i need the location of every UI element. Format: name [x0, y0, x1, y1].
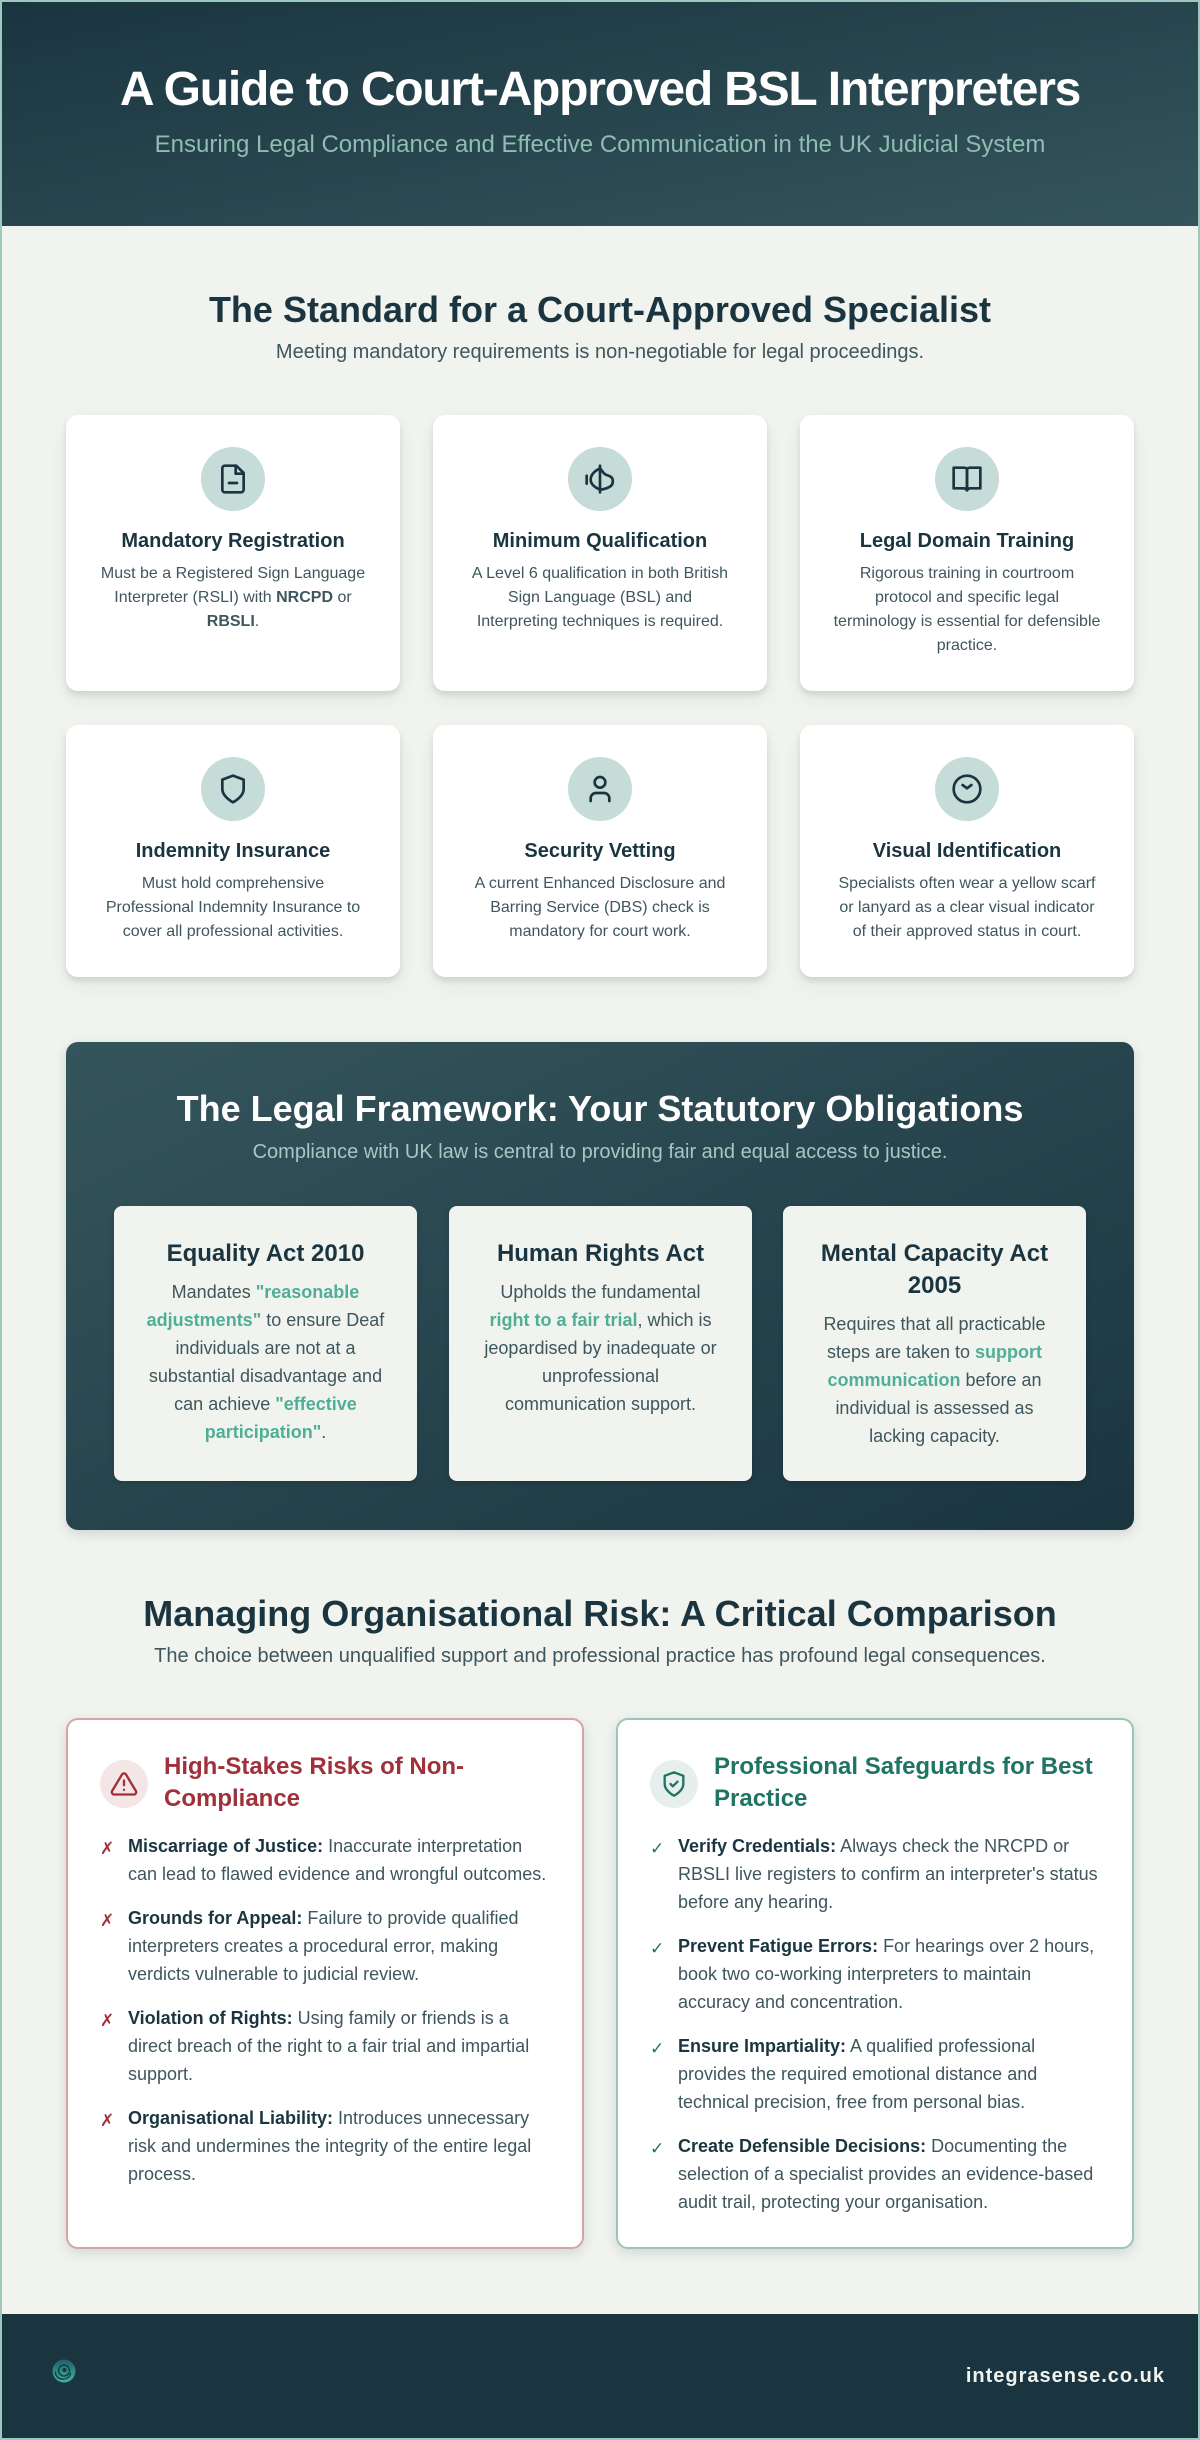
card: minimum qualification — [433, 415, 767, 691]
risk item — [100, 2108, 531, 2184]
safeguard item: audit trail, protecting your organisation. — [678, 2192, 988, 2212]
subheading: organisational risk: The choice between unqualified support and professional practice has profound legal consequences. — [154, 1645, 1046, 1667]
icon: warning triangle — [100, 1760, 148, 1808]
card: mental capacity act: Requires that all practicable — [823, 1314, 1046, 1334]
risk item: ✗ — [100, 1839, 114, 1859]
card: mandatory registration: Must be a Registered Sign Language — [101, 565, 365, 582]
subheading: legal framework: Compliance with UK law is central to providing fair and equal access to justice. — [253, 1141, 947, 1163]
risk item: Violation of Rights: Using family or friends is a — [128, 2008, 509, 2028]
card: mandatory registration: Interpreter (RSLI) with NRCPD or — [114, 589, 352, 606]
card: legal domain training: practice. — [937, 637, 997, 654]
card: indemnity insurance: Professional Indemnity Insurance to — [106, 899, 360, 916]
risk item: risk and undermines the integrity of the entire legal — [128, 2136, 531, 2156]
safeguard item: ✓ — [650, 1839, 664, 1859]
heading: the standard: The Standard for a Court-Approved Specialist — [209, 289, 991, 330]
safeguard item: book two co-working interpreters to maintain — [678, 1964, 1031, 1984]
card: human rights act: Human Rights Act — [497, 1240, 704, 1267]
card: indemnity insurance: Must hold comprehensive — [142, 875, 324, 892]
card: human rights act: Upholds the fundamental — [500, 1282, 701, 1302]
title: A Guide to Court-Approved BSL Interpreters — [120, 63, 1080, 116]
card: mandatory registration: Mandatory Registration — [121, 530, 345, 552]
panel: risks — [66, 1718, 584, 2249]
heading: risks — [164, 1753, 464, 1812]
card: visual identification: Visual Identification — [873, 840, 1061, 862]
card: equality act: Equality Act 2010 — [167, 1240, 364, 1267]
card: human rights act: communication support. — [505, 1394, 696, 1414]
card: visual identification — [800, 725, 1134, 977]
card: indemnity insurance — [66, 725, 400, 977]
safeguard item: selection of a specialist provides an evidence-based — [678, 2164, 1093, 2184]
safeguard item — [650, 1836, 1098, 1912]
card: minimum qualification: Interpreting techniques is required. — [477, 613, 723, 630]
card: legal domain training: terminology is essential for defensible — [834, 613, 1100, 630]
risk item — [100, 1908, 518, 1984]
card: mandatory registration: RBSLI. — [207, 613, 259, 630]
card: mental capacity act: lacking capacity. — [869, 1426, 1000, 1446]
heading: safeguards — [714, 1753, 1093, 1812]
panel: safeguards — [616, 1718, 1134, 2249]
safeguard item: before any hearing. — [678, 1892, 833, 1912]
safeguard item: technical precision, free from personal bias. — [678, 2092, 1025, 2112]
safeguard item: ✓ — [650, 2139, 664, 2159]
card: security vetting: Barring Service (DBS) check is — [490, 899, 710, 916]
icon: open book — [935, 447, 999, 511]
card: visual identification: or lanyard as a clear visual indicator — [839, 899, 1095, 916]
card: visual identification: Specialists often wear a yellow scarf — [838, 875, 1096, 892]
safeguard item: Prevent Fatigue Errors: For hearings over 2 hours, — [678, 1936, 1094, 1956]
card: equality act — [114, 1206, 417, 1481]
risk item: interpreters creates a procedural error, making — [128, 1936, 498, 1956]
risk item: can lead to flawed evidence and wrongful outcomes. — [128, 1864, 546, 1884]
card: security vetting: Security Vetting — [524, 840, 676, 862]
safeguard item: RBSLI live registers to confirm an interpreter's status — [678, 1864, 1098, 1884]
heading: legal framework: The Legal Framework: Your Statutory Obligations — [177, 1088, 1023, 1129]
card: equality act: participation". — [205, 1422, 326, 1442]
icon: shield check — [650, 1760, 698, 1808]
card: mental capacity act: communication before an — [827, 1370, 1042, 1390]
safeguard item — [650, 2136, 1093, 2212]
safeguard item: Ensure Impartiality: A qualified professional — [678, 2036, 1035, 2056]
icon: circle badge — [935, 757, 999, 821]
card: human rights act: right to a fair trial, which is — [489, 1310, 712, 1330]
card: minimum qualification: Sign Language (BSL) and — [508, 589, 692, 606]
subheading: the standard: Meeting mandatory requirements is non-negotiable for legal proceedings. — [276, 341, 924, 363]
card: equality act: adjustments" to ensure Deaf — [147, 1310, 384, 1330]
card: equality act: individuals are not at a — [175, 1338, 356, 1358]
risk item: support. — [128, 2064, 193, 2084]
card: minimum qualification: Minimum Qualification — [493, 530, 707, 552]
card: legal domain training — [800, 415, 1134, 691]
card: human rights act: jeopardised by inadequate or — [484, 1338, 717, 1358]
card: legal domain training: Rigorous training in courtroom — [860, 565, 1074, 582]
risk item: Organisational Liability: Introduces unnecessary — [128, 2108, 529, 2128]
card: equality act: substantial disadvantage and — [149, 1366, 382, 1386]
footer — [2, 2314, 1198, 2438]
header banner — [2, 2, 1198, 226]
heading: safeguards: Professional Safeguards for Best — [714, 1753, 1093, 1780]
card: mental capacity act: individual is assessed as — [835, 1398, 1034, 1418]
risk item — [100, 2008, 529, 2084]
subtitle: Ensuring Legal Compliance and Effective Communication in the UK Judicial System — [155, 131, 1045, 158]
card: legal domain training: protocol and specific legal — [875, 589, 1059, 606]
heading: safeguards: Practice — [714, 1785, 807, 1812]
card: mental capacity act: steps are taken to support — [827, 1342, 1042, 1362]
risk item: verdicts vulnerable to judicial review. — [128, 1964, 419, 1984]
card: visual identification: of their approved status in court. — [853, 923, 1081, 940]
safeguard item: Verify Credentials: Always check the NRCPD or — [678, 1836, 1069, 1856]
card: mandatory registration — [66, 415, 400, 691]
heading: organisational risk: Managing Organisational Risk: A Critical Comparison — [143, 1593, 1057, 1634]
icon: document — [201, 447, 265, 511]
card: equality act: Mandates "reasonable — [172, 1282, 359, 1302]
icon: person — [568, 757, 632, 821]
risk item: direct breach of the right to a fair trial and impartial — [128, 2036, 529, 2056]
card: indemnity insurance: cover all professional activities. — [123, 923, 343, 940]
heading: risks: High-Stakes Risks of Non- — [164, 1753, 464, 1780]
icon: qualification — [568, 447, 632, 511]
icon: spiral logo — [52, 2360, 76, 2382]
card: human rights act: unprofessional — [542, 1366, 659, 1386]
card: equality act: can achieve "effective — [174, 1394, 357, 1414]
card: indemnity insurance: Indemnity Insurance — [136, 840, 330, 862]
heading: risks: Compliance — [164, 1785, 300, 1812]
risk item: Miscarriage of Justice: Inaccurate interpretation — [128, 1836, 522, 1856]
card: security vetting: mandatory for court work. — [509, 923, 691, 940]
safeguard item: accuracy and concentration. — [678, 1992, 903, 2012]
card: minimum qualification: A Level 6 qualification in both British — [472, 565, 728, 582]
card: security vetting: A current Enhanced Disclosure and — [475, 875, 725, 892]
risk item: ✗ — [100, 2111, 114, 2131]
safeguard item: ✓ — [650, 2039, 664, 2059]
risk item: process. — [128, 2164, 196, 2184]
risk item: ✗ — [100, 2011, 114, 2031]
safeguard item: provides the required emotional distance and — [678, 2064, 1037, 2084]
card: mental capacity act: Mental Capacity Act — [821, 1240, 1048, 1267]
panel: legal framework — [66, 1042, 1134, 1530]
safeguard item: Create Defensible Decisions: Documenting the — [678, 2136, 1067, 2156]
card: mental capacity act — [783, 1206, 1086, 1481]
risk item: Grounds for Appeal: Failure to provide qualified — [128, 1908, 518, 1928]
safeguard item: ✓ — [650, 1939, 664, 1959]
website: integrasense.co.uk — [966, 2365, 1165, 2387]
card: human rights act — [449, 1206, 752, 1481]
card: mental capacity act: 2005 — [908, 1272, 961, 1299]
risk item: ✗ — [100, 1911, 114, 1931]
icon: shield — [201, 757, 265, 821]
safeguard item — [650, 2036, 1037, 2112]
safeguard item — [650, 1936, 1094, 2012]
card: security vetting — [433, 725, 767, 977]
card: legal domain training: Legal Domain Training — [860, 530, 1074, 552]
risk item — [100, 1836, 546, 1884]
